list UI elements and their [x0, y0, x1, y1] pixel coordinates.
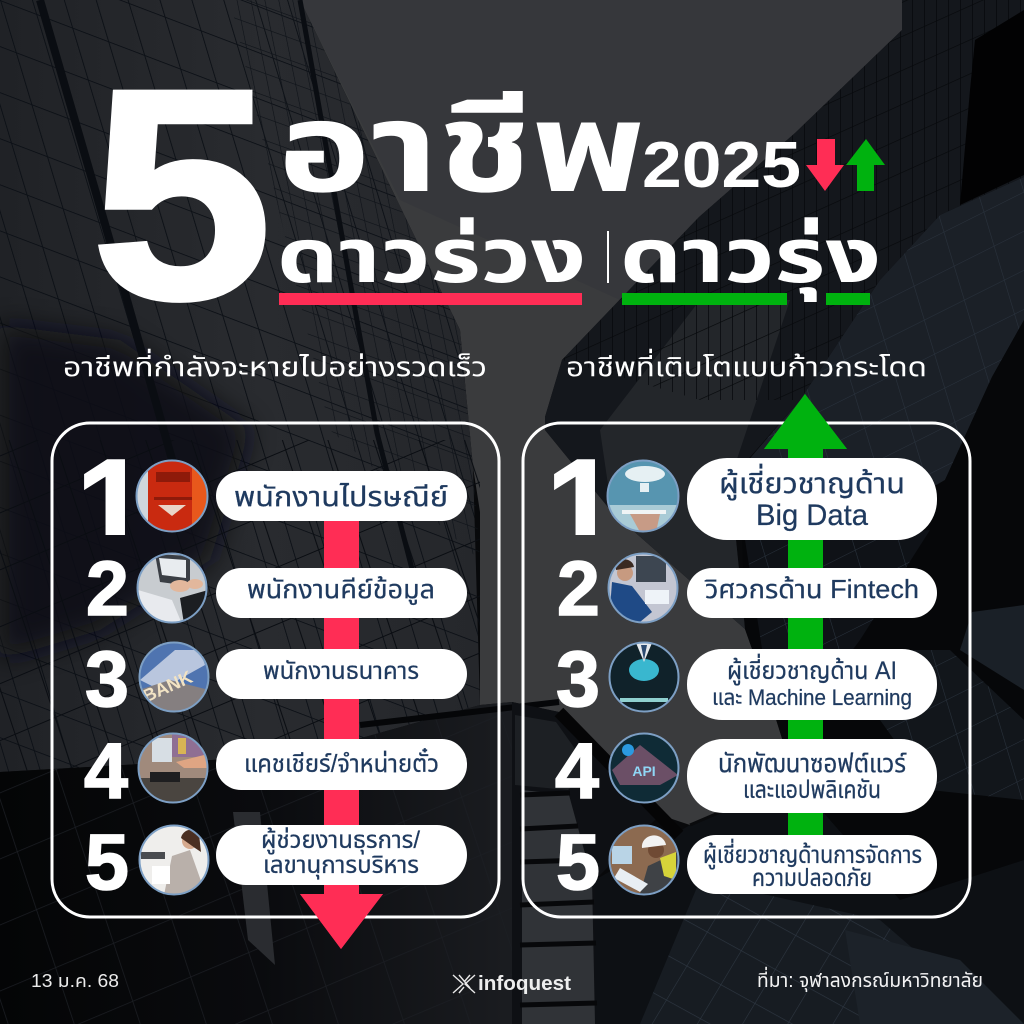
image: AI brain — [610, 643, 678, 711]
title: year 2025: 2025 — [642, 128, 801, 201]
icon: small red down arrow — [806, 139, 844, 191]
image ring 3 — [140, 642, 208, 712]
green underline — [622, 293, 870, 305]
image: API developer: API — [632, 763, 656, 779]
pill: พนักงานไปรษณีย์ — [216, 471, 467, 521]
image: API developer — [610, 734, 678, 802]
pill: นักพัฒนาซอฟต์แวร์ และแอปพลิเคชัน — [687, 739, 937, 813]
pill: แคชเชียร์/จำหน่ายตั๋ว: แคชเชียร์/จำหน่ายตั๋ว — [244, 747, 439, 778]
image: fintech engineer — [609, 554, 677, 622]
image ring 5 — [140, 826, 208, 894]
number 3: 3 — [85, 634, 129, 723]
pill: ผู้เชี่ยวชาญด้าน AI และ Machine Learning — [687, 649, 937, 720]
pill: พนักงานคีย์ข้อมูล — [216, 568, 467, 618]
pill: ผู้ช่วยงานธุรการ/ เลขานุการบริหาร — [216, 825, 467, 885]
pill: ผู้เชี่ยวชาญด้าน Big Data: ผู้เชี่ยวชาญด้าน — [719, 463, 905, 501]
title: ดาวร่วง: ดาวร่วง — [277, 214, 586, 299]
number 5: 5 — [85, 817, 129, 906]
title: อาชีพ: อาชีพ — [278, 79, 645, 218]
pill: ผู้ช่วยงานธุรการ/ เลขานุการบริหาร: เลขานุการบริหาร — [263, 852, 419, 880]
number 1: 1 — [76, 432, 148, 578]
pill: นักพัฒนาซอฟต์แวร์ และแอปพลิเคชัน: และแอปพลิเคชัน — [743, 776, 881, 804]
number 4: 4 — [84, 726, 128, 815]
pill: วิศวกรด้าน Fintech — [687, 568, 937, 618]
image: secretary — [139, 825, 209, 895]
pill: ผู้เชี่ยวชาญด้านการจัดการ ความปลอดภัย — [687, 835, 937, 894]
pill: ผู้เชี่ยวชาญด้าน AI และ Machine Learning: ผู้เชี่ยวชาญด้าน AI — [727, 653, 897, 686]
pill: นักพัฒนาซอฟต์แวร์ และแอปพลิเคชัน: นักพัฒนาซอฟต์แวร์ — [718, 748, 907, 778]
image ring 3 — [610, 642, 678, 712]
footer: date: 13 ม.ค. 68 — [31, 971, 119, 991]
image: safety manager — [610, 826, 678, 894]
number 2: 2 — [557, 546, 600, 632]
pill: ผู้เชี่ยวชาญด้านการจัดการ ความปลอดภัย: ผู้เชี่ยวชาญด้านการจัดการ — [703, 838, 922, 870]
image ring 2 — [138, 554, 206, 622]
pill: ผู้เชี่ยวชาญด้าน Big Data — [687, 458, 937, 540]
pill: วิศวกรด้าน Fintech: วิศวกรด้าน Fintech — [704, 574, 919, 604]
panel: declining jobs — [52, 423, 499, 949]
image: cashier — [138, 733, 208, 803]
number 5: 5 — [556, 817, 600, 906]
pill: พนักงานคีย์ข้อมูล: พนักงานคีย์ข้อมูล — [247, 574, 435, 605]
pill: พนักงานไปรษณีย์: พนักงานไปรษณีย์ — [234, 481, 448, 512]
red down arrow — [300, 471, 383, 949]
image: post box — [136, 460, 208, 532]
pill: พนักงานธนาคาร: พนักงานธนาคาร — [263, 658, 419, 685]
green up arrow — [764, 394, 847, 838]
number 1: 1 — [546, 432, 618, 578]
icon: small green up arrow — [846, 139, 885, 191]
image: bank sign — [140, 644, 208, 710]
right subheading: อาชีพที่เติบโตแบบก้าวกระโดด — [566, 348, 927, 382]
pill: ผู้เชี่ยวชาญด้าน Big Data: Big Data — [756, 499, 868, 532]
panel: growing jobs — [523, 394, 970, 917]
logo wordmark: infoquest — [478, 973, 571, 995]
left subheading: อาชีพที่กำลังจะหายไปอย่างรวดเร็ว — [63, 348, 487, 382]
pill: ผู้ช่วยงานธุรการ/ เลขานุการบริหาร: ผู้ช่วยงานธุรการ/ — [261, 826, 420, 855]
pill: พนักงานธนาคาร — [216, 649, 467, 699]
image: cloud data — [607, 460, 679, 532]
pill: ผู้เชี่ยวชาญด้านการจัดการ ความปลอดภัย: ความปลอดภัย — [752, 865, 872, 892]
footer: source: ที่มา: จุฬาลงกรณ์มหาวิทยาลัย — [757, 966, 983, 992]
number 2: 2 — [86, 546, 129, 632]
pill: ผู้เชี่ยวชาญด้าน AI และ Machine Learning: และ Machine Learning — [712, 685, 912, 710]
number 4: 4 — [555, 726, 599, 815]
title: ดาวรุ่ง: ดาวรุ่ง — [620, 214, 881, 302]
image ring 5 — [610, 826, 678, 894]
number 3: 3 — [556, 634, 600, 723]
logo icon — [453, 975, 475, 993]
red underline — [279, 293, 582, 305]
image ring 1 — [608, 460, 678, 532]
title divider — [607, 231, 609, 283]
image ring 4 — [610, 734, 678, 802]
title: big number 5: 5 — [90, 26, 272, 362]
image ring 2 — [608, 554, 678, 622]
pill: แคชเชียร์/จำหน่ายตั๋ว — [216, 739, 467, 790]
image: laptop typing — [138, 554, 206, 622]
image ring 1 — [136, 460, 208, 532]
image: bank sign: BANK — [140, 667, 195, 706]
image ring 4 — [138, 734, 208, 802]
